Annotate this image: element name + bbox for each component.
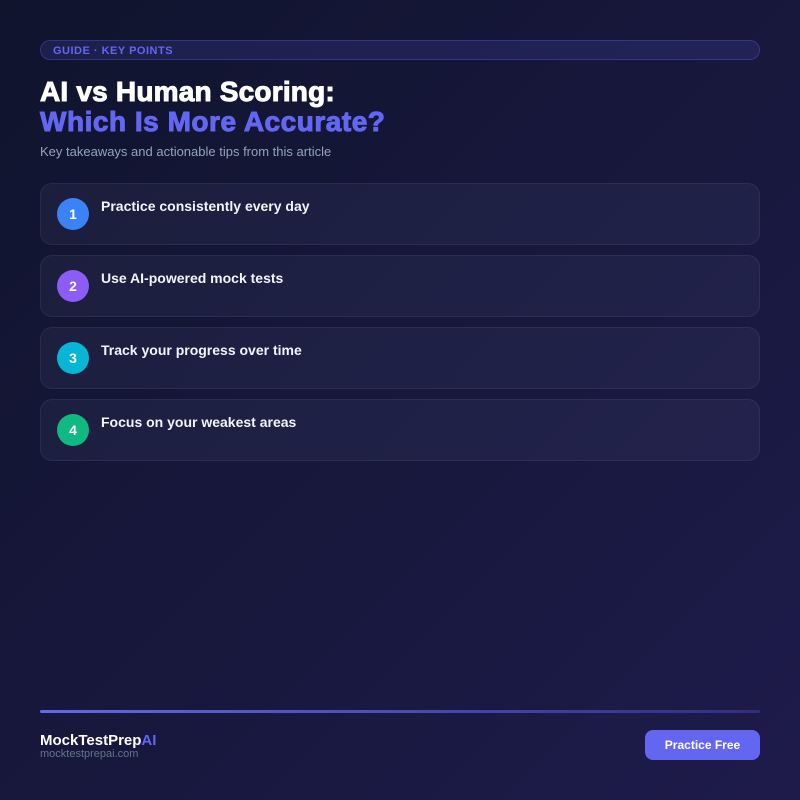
tip 4 text: Focus on your weakest areas (101, 414, 296, 430)
icon: number 2 (57, 270, 89, 302)
icon: number 2: 2 (69, 278, 77, 294)
tip 3 text: Track your progress over time (101, 342, 302, 358)
icon: number 3 (57, 342, 89, 374)
icon: number 4 (57, 414, 89, 446)
badge (40, 40, 760, 60)
icon: number 1: 1 (69, 206, 77, 222)
icon: number 1 (57, 198, 89, 230)
panel: tip 3 (40, 327, 760, 389)
brand url: mocktestprepai.com (40, 748, 138, 760)
button: practice free: Practice Free (665, 738, 740, 752)
title: Which Is More Accurate? (40, 106, 385, 137)
icon: number 4: 4 (69, 422, 77, 438)
footer divider bar (40, 710, 760, 713)
subtitle: Key takeaways and actionable tips from this article (40, 144, 331, 159)
panel: tip 2 (40, 255, 760, 317)
button: practice free (645, 730, 760, 760)
tip 2 text: Use AI-powered mock tests (101, 270, 283, 286)
title: AI vs Human Scoring: (40, 76, 335, 107)
panel: tip 4 (40, 399, 760, 461)
panel: tip 1 (40, 183, 760, 245)
title (39, 76, 385, 137)
icon: number 3: 3 (69, 350, 77, 366)
badge: GUIDE · KEY POINTS (53, 45, 173, 57)
tip 1 text: Practice consistently every day (101, 198, 310, 214)
brand name: MockTestPrepAI (40, 732, 156, 749)
